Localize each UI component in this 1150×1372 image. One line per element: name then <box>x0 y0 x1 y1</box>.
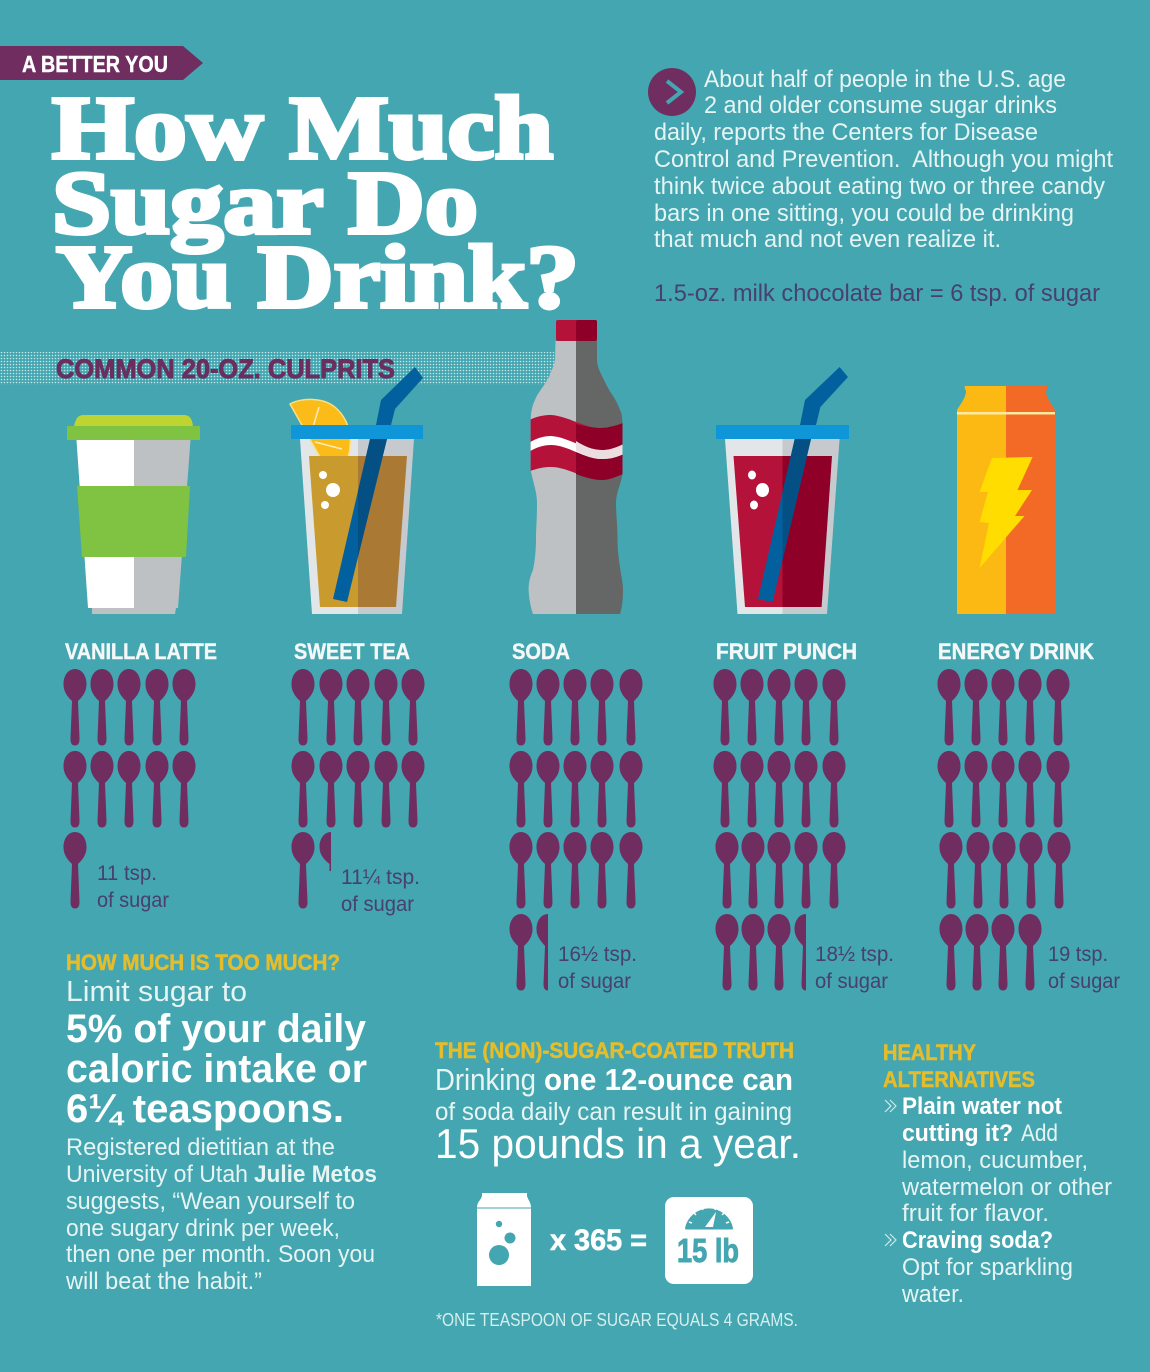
statement: 15 pounds in a year. <box>435 1120 801 1167</box>
section tag: A Better You: A BETTER YOU <box>22 51 168 77</box>
intro text: Control and Prevention. Although you might <box>654 146 1113 173</box>
illustration: fruit punch glass <box>716 367 849 614</box>
statement: one 12-ounce can <box>544 1062 793 1097</box>
spoons: soda 16 1/2 tsp <box>510 669 642 990</box>
dietitian advice <box>65 1134 377 1295</box>
tip: craving soda <box>885 1227 1073 1308</box>
sugar amount: energy drink: 19 tsp. <box>1048 943 1108 966</box>
spoons: sweet tea 11 1/4 tsp <box>292 669 424 908</box>
footnote: *ONE TEASPOON OF SUGAR EQUALS 4 GRAMS. <box>436 1310 798 1330</box>
key statement: caloric intake or <box>66 1047 367 1091</box>
spoons: energy drink 19 tsp <box>938 669 1070 990</box>
panel: non-sugar-coated truth <box>435 1038 801 1330</box>
sugar amount: soda <box>558 943 637 993</box>
sugar amount: fruit punch: 18½ tsp. <box>815 943 894 966</box>
key statement: 5% of your daily <box>66 1007 367 1051</box>
dietitian advice: will beat the habit.” <box>65 1268 262 1295</box>
dietitian advice: then one per month. Soon you <box>66 1241 375 1268</box>
heading: HOW MUCH IS TOO MUCH? <box>66 950 340 975</box>
dietitian advice: University of Utah <box>66 1161 248 1188</box>
intro text: bars in one sitting, you could be drinking <box>654 200 1074 227</box>
sugar amount: fruit punch: of sugar <box>815 970 888 993</box>
sugar amount: latte <box>97 862 169 912</box>
drink labels <box>65 639 1094 664</box>
tip: plain water: Add <box>1021 1120 1058 1147</box>
heading: THE (NON)-SUGAR-COATED TRUTH <box>435 1038 794 1063</box>
tip: craving soda: Opt for sparkling <box>902 1254 1073 1281</box>
sugar amount: latte: of sugar <box>97 889 169 912</box>
title: You Drink? <box>56 228 579 327</box>
panel: how much is too much <box>65 950 377 1295</box>
dietitian advice: Registered dietitian at the <box>66 1134 335 1161</box>
dotted band with section heading: COMMON 20-OZ. CULPRITS <box>56 354 395 384</box>
heading: ALTERNATIVES <box>883 1067 1035 1092</box>
intro text: About half of people in the U.S. age <box>704 66 1066 93</box>
tip: craving soda: Craving soda? <box>902 1227 1053 1254</box>
illustration: soda bottle <box>528 320 623 614</box>
tip: craving soda: water. <box>901 1281 964 1308</box>
section tag: A Better You <box>0 46 203 80</box>
drink labels: ENERGY DRINK <box>938 639 1094 664</box>
sugar amount: fruit punch <box>815 943 894 993</box>
key statement: 6¼ teaspoons. <box>66 1087 344 1131</box>
intro text: daily, reports the Centers for Disease <box>654 119 1038 146</box>
sugar amount: energy drink: of sugar <box>1048 970 1120 993</box>
title <box>52 79 579 327</box>
intro text: that much and not even realize it. <box>654 226 1001 253</box>
chocolate bar note: 1.5-oz. milk chocolate bar = 6 tsp. of sugar <box>654 280 1100 307</box>
tip: plain water: cutting it? <box>902 1120 1013 1147</box>
spoons: vanilla latte 11 tsp <box>64 669 196 908</box>
title: How Much <box>52 79 553 178</box>
tip: plain water: lemon, cucumber, <box>902 1147 1088 1174</box>
icon: scale reading 15 lb <box>665 1197 753 1284</box>
sugar amount: latte: 11 tsp. <box>97 862 157 885</box>
drink labels: FRUIT PUNCH <box>716 639 857 664</box>
key statement <box>66 1007 367 1131</box>
sugar amount: soda: 16½ tsp. <box>558 943 637 966</box>
drink labels: VANILLA LATTE <box>65 639 217 664</box>
icon: scale reading 15 lb: 15 lb <box>677 1232 739 1269</box>
intro text: think twice about eating two or three candy <box>654 173 1105 200</box>
intro text <box>654 66 1113 253</box>
sugar amount: sweet tea: of sugar <box>341 893 414 916</box>
tip: plain water: Plain water not <box>902 1093 1062 1120</box>
sugar amount: sweet tea <box>341 866 420 916</box>
statement <box>435 1062 801 1167</box>
icon: arrow bullet <box>648 68 696 116</box>
dietitian advice: suggests, “Wean yourself to <box>66 1188 355 1215</box>
panel: healthy alternatives <box>883 1040 1112 1308</box>
tip: plain water: watermelon or other <box>901 1174 1112 1201</box>
illustration: sweet tea glass <box>290 367 423 614</box>
intro text: 2 and older consume sugar drinks <box>704 92 1057 119</box>
illustration: vanilla latte cup <box>67 415 200 614</box>
drink labels: SWEET TEA <box>294 639 410 664</box>
icon: soda can <box>477 1193 531 1286</box>
dotted band with section heading <box>0 352 556 385</box>
sugar amount: soda: of sugar <box>558 970 631 993</box>
sugar amount: sweet tea: 11¼ tsp. <box>341 866 420 889</box>
spoons: fruit punch 18 1/2 tsp <box>714 669 846 990</box>
sugar amount: energy drink <box>1048 943 1120 993</box>
statement: Drinking <box>435 1062 536 1097</box>
heading <box>883 1040 1035 1092</box>
heading: HEALTHY <box>883 1040 976 1065</box>
tip: plain water <box>885 1093 1112 1227</box>
dietitian advice: Julie Metos <box>254 1161 377 1188</box>
statement: of soda daily can result in gaining <box>435 1098 792 1126</box>
equation: x 365 = <box>550 1224 647 1257</box>
dietitian advice: one sugary drink per week, <box>66 1215 340 1242</box>
illustration: energy drink can <box>957 386 1055 614</box>
title: Sugar Do <box>52 154 478 253</box>
drink labels: SODA <box>512 639 570 664</box>
lead in: Limit sugar to <box>66 976 247 1008</box>
tip: plain water: fruit for flavor. <box>902 1200 1049 1227</box>
